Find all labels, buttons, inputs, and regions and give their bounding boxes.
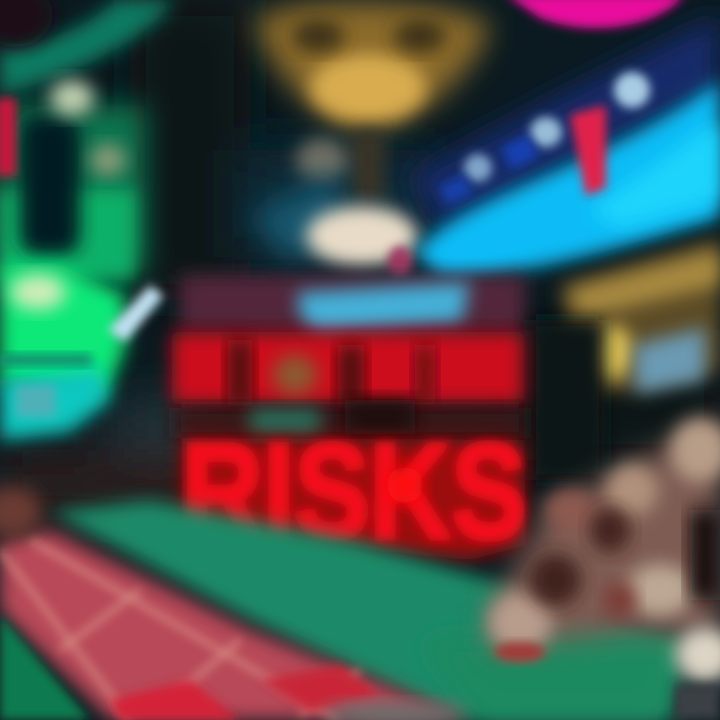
dark pillar on the right <box>530 320 605 480</box>
teal base shade <box>250 175 345 262</box>
table felt <box>50 500 680 720</box>
panel: green roulette table <box>0 500 680 720</box>
white dots <box>614 72 650 108</box>
panel: pale blue banner above the risks text <box>180 275 525 332</box>
cyan band <box>415 80 720 278</box>
cyan lower band <box>0 368 110 440</box>
dark central slot <box>20 115 80 255</box>
panel: blue neon band at top right <box>388 0 720 278</box>
pale blue streak <box>108 285 164 342</box>
lower left green corner <box>0 615 90 720</box>
gold bright row <box>570 250 720 318</box>
red left bar <box>0 98 16 176</box>
trophy stem <box>352 130 384 200</box>
panel: neon green sign on the left <box>0 0 175 440</box>
icon: gold trophy <box>250 2 490 266</box>
red block <box>172 332 524 404</box>
red mark <box>570 105 606 196</box>
gold backing <box>560 238 720 395</box>
magenta top sign <box>505 0 685 28</box>
heading: risks <box>182 415 526 567</box>
white glow oval <box>10 274 66 310</box>
grey shine <box>296 138 348 182</box>
chip mass <box>490 420 720 650</box>
neon green body <box>0 265 125 395</box>
background shading <box>0 0 720 520</box>
trophy highlight <box>310 54 426 122</box>
grey bottom chip <box>325 702 465 720</box>
red backing <box>182 438 526 560</box>
blue screen <box>635 328 705 394</box>
dark bottom right corner <box>675 685 720 720</box>
blue marks <box>501 135 539 169</box>
bright red squares <box>110 680 240 720</box>
navy band <box>410 15 720 230</box>
icon: left chip <box>0 486 42 538</box>
pale bottom right chip <box>675 627 720 683</box>
dark letter gaps <box>228 340 252 406</box>
dark circle top left <box>0 0 53 47</box>
risks text: RISKS <box>182 415 526 567</box>
trophy dark openings <box>292 20 344 52</box>
green column bright <box>0 190 135 280</box>
small dark green middle strip <box>175 400 525 438</box>
roulette red field <box>0 530 470 720</box>
lower grey block <box>16 385 56 417</box>
dark chip gaps <box>529 554 581 606</box>
green column upper <box>0 105 145 270</box>
table felt lower right <box>420 630 680 720</box>
bright centre <box>387 467 423 503</box>
gold light <box>588 324 632 380</box>
olive mid glyph <box>273 355 317 395</box>
maroon frame <box>180 275 525 330</box>
pale betting lines <box>0 540 360 720</box>
trophy bowl <box>255 2 490 130</box>
bright blue core <box>590 120 720 228</box>
dark mid strip <box>0 354 92 366</box>
blue banner <box>298 282 470 332</box>
cream dots <box>50 80 94 116</box>
top left teal arc <box>0 0 175 95</box>
trophy cream base <box>306 206 418 266</box>
pink dot <box>388 246 412 278</box>
beige chips <box>670 418 720 482</box>
icon: casino chip stacks <box>488 418 720 720</box>
heading line: upper red word block <box>172 332 524 407</box>
panel: gold sign on the right <box>560 238 720 395</box>
